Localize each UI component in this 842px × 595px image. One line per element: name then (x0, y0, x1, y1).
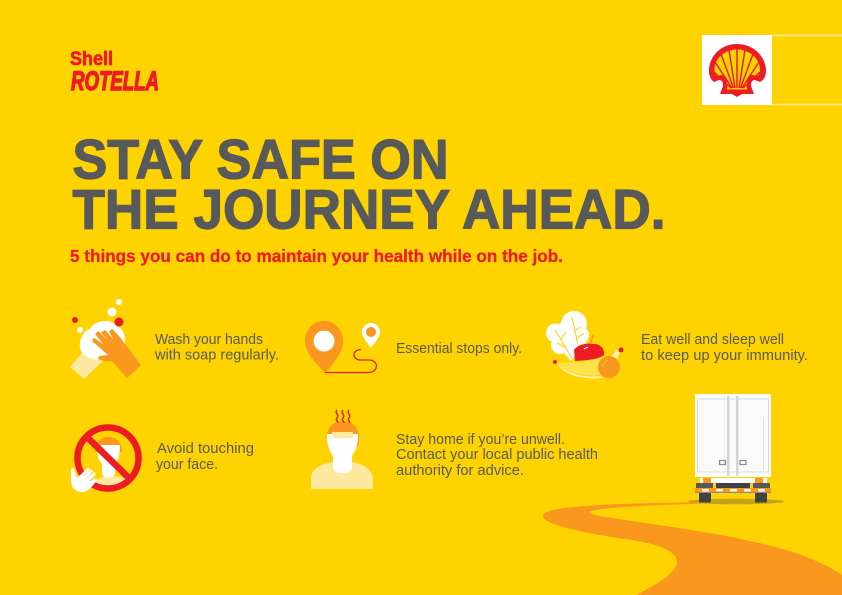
icon: shell pecten (709, 44, 766, 97)
icon: person with fever (311, 410, 373, 489)
text: wash hands: with soap regularly. (154, 348, 279, 364)
text: eat well: to keep up your immunity. (641, 348, 808, 364)
icon: location pins (305, 321, 380, 373)
Shell Rotella logo: Shell (70, 49, 113, 70)
text: wash hands (154, 332, 279, 364)
Shell Rotella logo: ROTELLA (71, 66, 159, 96)
text: avoid touching: your face. (156, 457, 218, 473)
text: stay home: authority for advice. (396, 463, 524, 479)
truck (688, 394, 784, 504)
title: THE JOURNEY AHEAD. (72, 178, 666, 240)
text: stay home (396, 432, 598, 479)
text: essential stops: Essential stops only. (396, 341, 522, 357)
truck chassis (695, 478, 771, 493)
text: wash hands: Wash your hands (155, 332, 263, 348)
subtitle: 5 things you can do to maintain your health while on the job. (70, 246, 563, 266)
icon: no touching face (71, 428, 138, 492)
text: eat well (641, 332, 808, 364)
text: stay home: Contact your local public health (396, 447, 598, 463)
title (72, 128, 666, 240)
text: eat well: Eat well and sleep well (641, 332, 784, 348)
title: STAY SAFE ON (72, 128, 448, 190)
text: avoid touching (156, 441, 254, 473)
truck door handles (720, 460, 746, 464)
text: avoid touching: Avoid touching (157, 441, 254, 457)
text: stay home: Stay home if you’re unwell. (396, 432, 565, 448)
Shell pecten logo box (702, 35, 842, 105)
truck body (695, 394, 771, 477)
road (543, 502, 842, 595)
truck shadow (688, 499, 784, 504)
icon: washing hands (70, 299, 141, 379)
icon: healthy food (546, 311, 624, 378)
truck wheels (699, 493, 767, 502)
Shell Rotella logo (70, 49, 159, 96)
